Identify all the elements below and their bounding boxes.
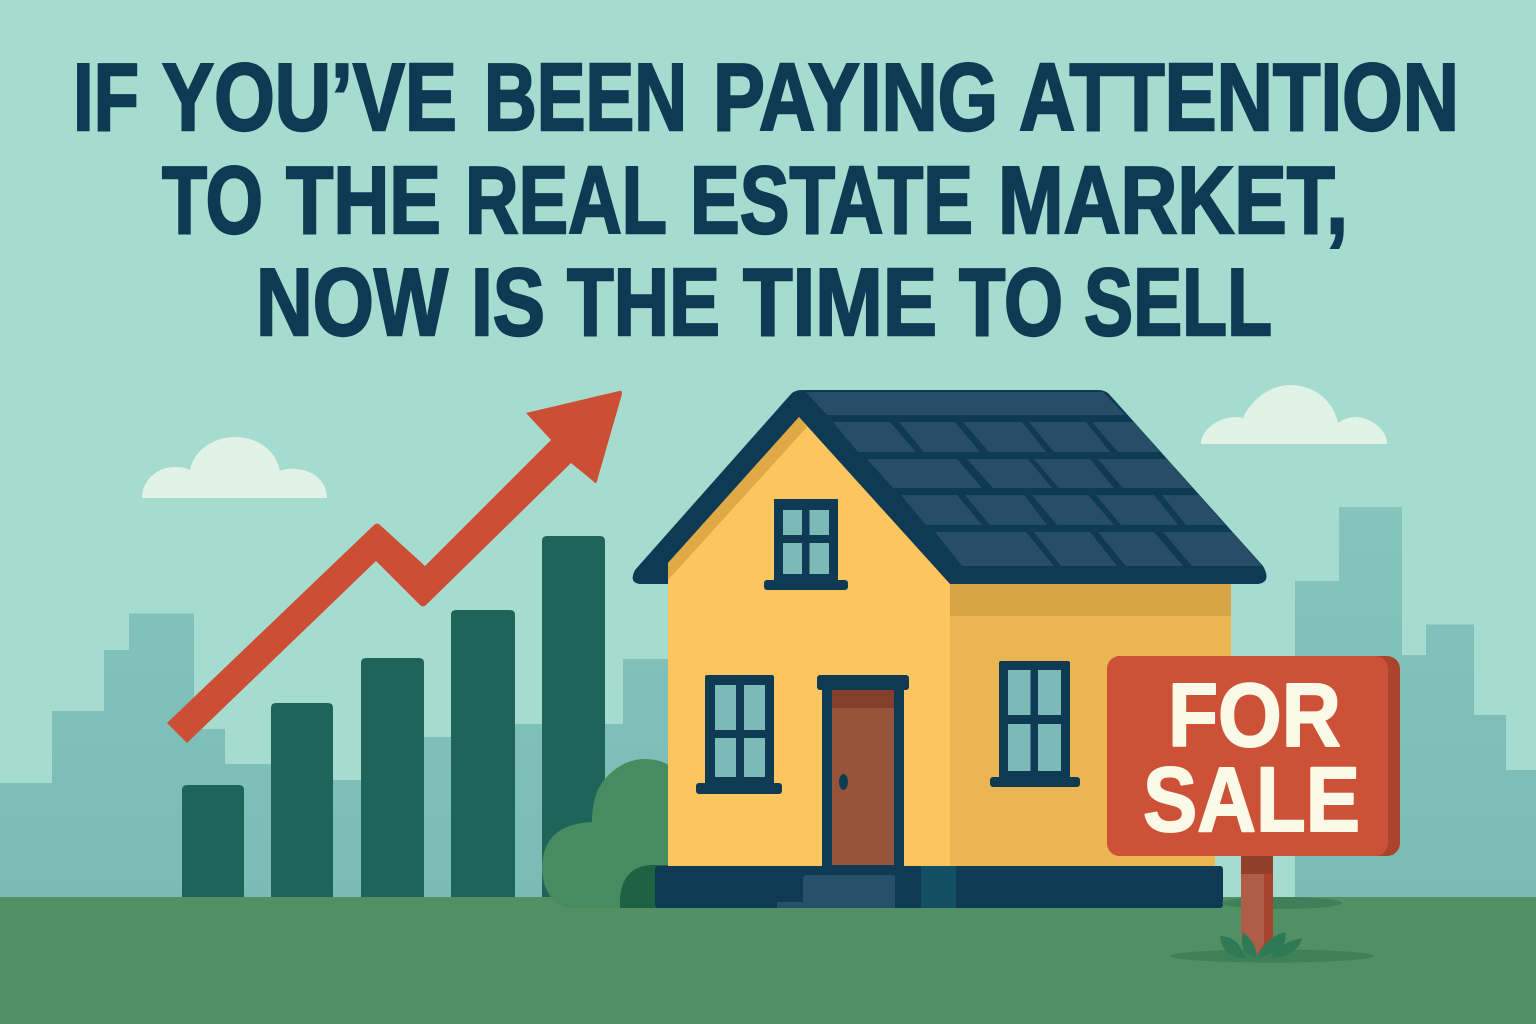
ground [0,897,1536,1024]
right window panes [1008,670,1061,771]
roof [633,390,1267,584]
right window frame [999,661,1070,779]
title line 2: ESTATE [690,147,973,254]
front wall [668,417,950,867]
title line 2: MARKET, [998,147,1348,254]
right skyline [1295,507,1536,900]
title line 3: SELL [1084,249,1272,356]
house [633,390,1267,908]
bar 3 [361,658,424,897]
lower left window [696,675,782,794]
title line 2 [162,147,1348,254]
title line 3: IS [471,249,545,356]
door [817,675,909,875]
title [73,44,1459,356]
left skyline [0,614,680,900]
board edge [1107,656,1400,856]
left window sill [696,783,782,794]
bush shadow [620,865,670,908]
post shade [1241,856,1273,874]
bar chart [182,536,605,897]
sign text FOR: FOR [1168,666,1341,766]
upper window panes [783,510,829,574]
right wall [950,584,1231,867]
right window sill [990,777,1080,787]
foundation [655,866,1223,908]
grass tuft [1220,932,1302,958]
bar 4 [451,610,515,897]
post face [1241,874,1264,955]
post side [1241,856,1273,955]
title line 2: THE [286,147,441,254]
lower right window [990,661,1080,787]
title line 1: YOU’VE [162,44,457,151]
roof base [633,390,1267,584]
bush [542,759,670,908]
foundation teal strip [921,866,956,908]
title line 2: REAL [465,147,667,254]
door panel [832,690,894,865]
roof top band [806,392,1125,415]
sign board [1107,656,1400,856]
sign ground shadow [1170,950,1374,962]
title line 1: IF [73,44,139,151]
title line 1 [73,44,1459,151]
gable shadow [668,417,807,580]
door frame [822,685,904,875]
rising red arrow [167,391,622,743]
right wall eave shadow [950,584,1231,616]
ground shadow behind post [1222,897,1342,909]
sign text SALE: SALE [1143,749,1360,851]
title line 3: TIME [743,249,937,356]
front steps [777,875,895,908]
board face [1107,656,1388,856]
sign post [1241,856,1273,955]
left window panes [715,685,765,777]
bar 5 [542,536,605,897]
bar 2 [271,703,333,897]
title line 1: BEEN [484,44,687,151]
bar 1 [182,785,244,897]
left window frame [705,675,774,785]
bush foliage [542,759,670,908]
title line 3: THE [567,249,720,356]
title line 2: TO [162,147,263,254]
upper window sill [764,580,848,590]
for sale sign [1107,656,1400,962]
title line 3: NOW [256,249,448,356]
door top band [832,690,894,708]
title line 3: TO [959,249,1063,356]
title line 1: PAYING [713,44,998,151]
right cloud [1201,385,1387,444]
upper window frame [774,499,838,583]
door knob [839,774,848,790]
title line 3 [256,249,1272,356]
shingles [833,422,1262,566]
left cloud [142,437,327,498]
door lintel [817,675,909,690]
upper window [764,499,848,590]
